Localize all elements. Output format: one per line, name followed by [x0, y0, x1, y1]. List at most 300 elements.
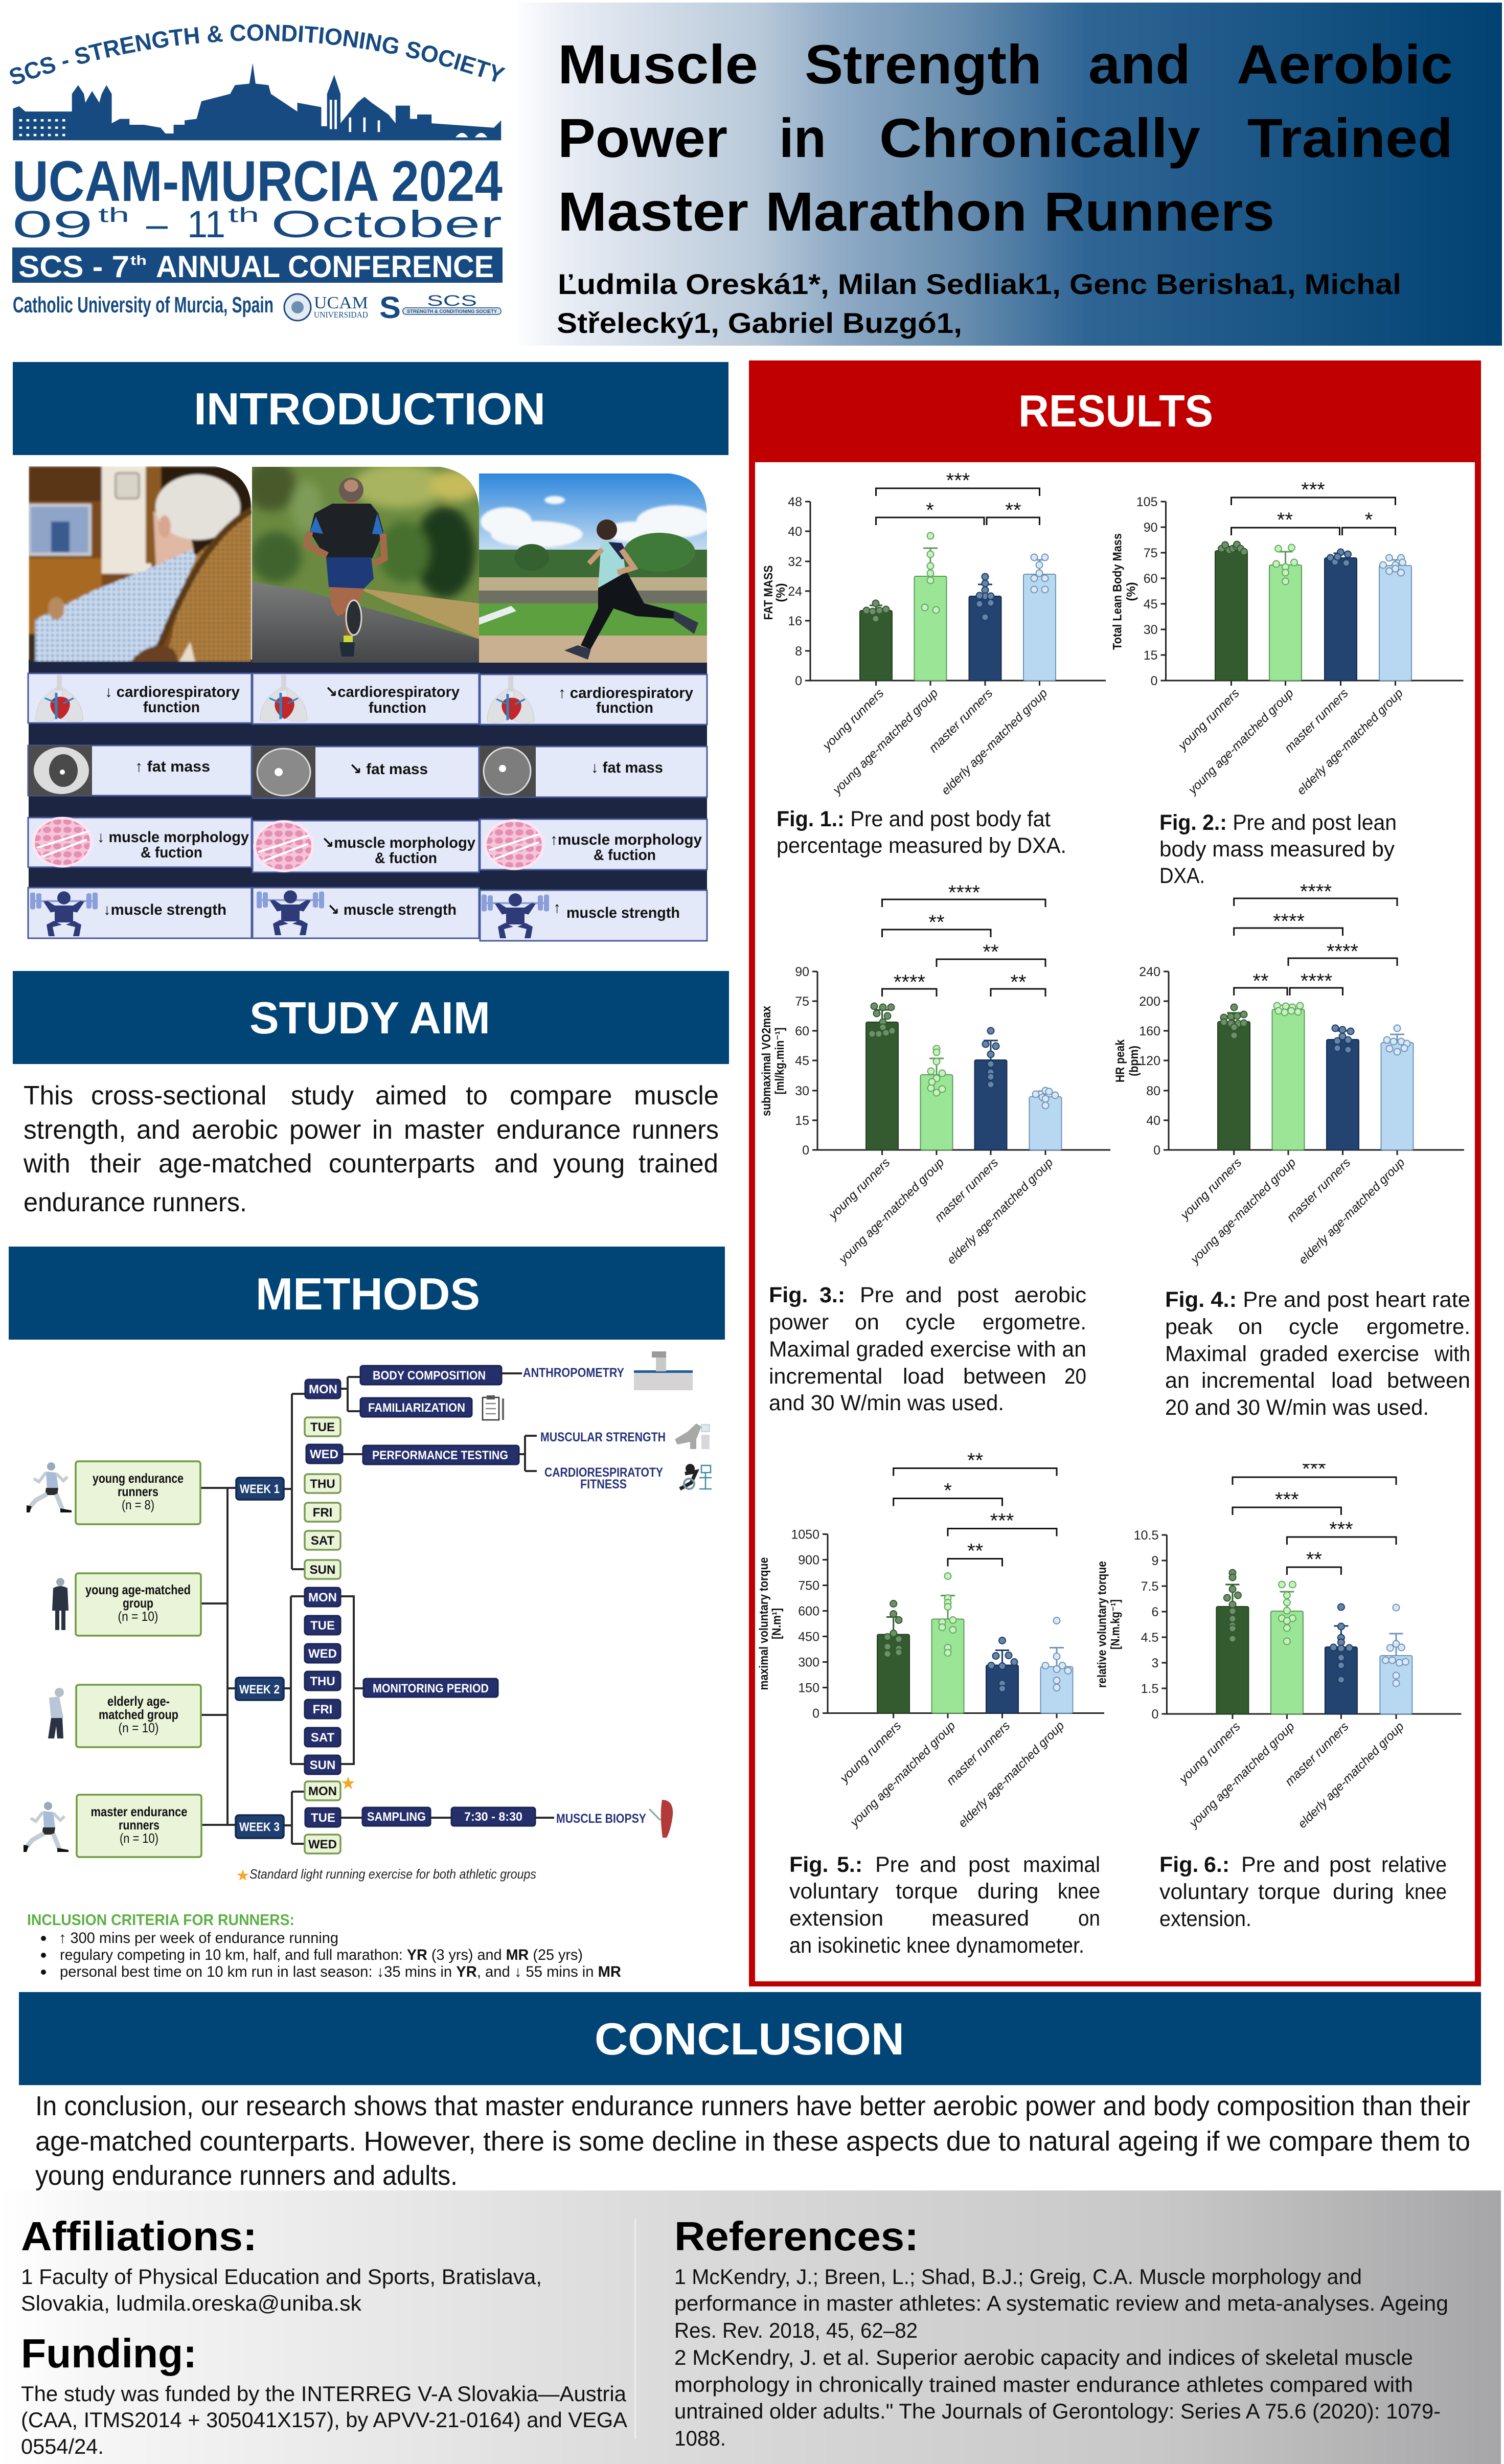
chart: fig 3 VO2max: **: [983, 941, 999, 963]
chart: fig 3 VO2max: master runners: [932, 1156, 1001, 1225]
heading: conclusion: CONCLUSION: [595, 2014, 904, 2064]
week 2 days: FRI: [313, 1703, 332, 1716]
chart: fig 3 VO2max: **: [928, 911, 945, 934]
references: morphology in chronically trained master endurance athletes compared with: [674, 2372, 1413, 2397]
chart: fig 1 fat mass: (%): [774, 583, 788, 602]
chart: fig 1 fat mass: 0: [795, 674, 802, 688]
chart: fig 6 relative voluntary torque: 3: [1151, 1656, 1158, 1670]
week 1 days: SUN: [310, 1563, 335, 1577]
measure labels: MUSCLE BIOPSY: [556, 1812, 646, 1826]
caption: fig 4: cycle: [1289, 1315, 1339, 1339]
process boxes: PERFORMANCE TESTING: [372, 1449, 508, 1462]
chart: fig 5 maximal voluntary torque: 0: [812, 1707, 819, 1721]
chart: fig 1 fat mass: 48: [788, 495, 802, 509]
study aim text: their: [90, 1148, 141, 1178]
flowchart: study design: [24, 1351, 712, 1884]
caption: fig 3: Maximal graded exercise with an: [769, 1337, 1086, 1362]
heading: introduction: [13, 362, 728, 455]
caption: fig 4: 20 and 30 W/min was used.: [1165, 1395, 1429, 1420]
chart: fig 2 lean body mass: 105: [1136, 495, 1157, 509]
week 3 days: MON: [308, 1784, 337, 1798]
study aim text: aerobic: [192, 1115, 278, 1144]
chart: fig 5 maximal voluntary torque: 750: [798, 1579, 819, 1593]
results heading: RESULTS: [1018, 386, 1213, 436]
study aim text: aimed: [375, 1080, 447, 1110]
references: untrained older adults." The Journals of Gerontology: Series A 75.6 (2020): 1079-: [674, 2399, 1441, 2423]
caption: fig 4: Maximal: [1165, 1342, 1247, 1366]
group: elderly age-matched: (n = 10): [119, 1720, 158, 1735]
study aim text: counterparts: [329, 1148, 475, 1178]
title: Aerobic: [1237, 33, 1453, 95]
week 1 days: SAT: [311, 1534, 334, 1548]
logo dates: 11: [187, 203, 225, 245]
conclusion text: age-matched counterparts. However, there is some decline in these aspects due to natural ageing if we compare them to: [35, 2126, 1470, 2157]
chart: fig 6 relative voluntary torque: 1.5: [1141, 1682, 1158, 1696]
chart: fig 5 maximal voluntary torque: **: [967, 1449, 983, 1472]
chart: fig 3 VO2max: [ml/kg.min⁻¹]: [773, 1028, 787, 1094]
SCS mini logo: STRENGTH & CONDITIONING SOCIETY: [407, 309, 497, 314]
row: muscle morphology: ↑muscle morphology: [550, 831, 702, 848]
flowchart connector lines: [200, 1373, 554, 1844]
chart: fig 3 VO2max: ****: [894, 971, 925, 993]
caption: fig 5: knee: [1058, 1879, 1100, 1904]
row: cardiorespiratory: function: [596, 699, 653, 716]
chart: fig 3 VO2max: 75: [795, 994, 809, 1009]
week 3 days: TUE: [311, 1811, 335, 1825]
chart: fig 4 HR peak: 240: [1139, 965, 1160, 979]
caption: fig 2: Fig. 2.: Pre and post lean: [1159, 810, 1397, 835]
chart: fig 2 lean body mass: 60: [1144, 572, 1157, 586]
references: 1088.: [674, 2426, 726, 2450]
week labels: WEEK 2: [239, 1683, 280, 1697]
chart: fig 5 maximal voluntary torque: elderly age-matched group: [955, 1719, 1067, 1830]
row: fat mass: [28, 745, 707, 798]
measure labels: ANTHROPOMETRY: [523, 1366, 624, 1380]
week labels: WEEK 1: [240, 1482, 280, 1496]
caption: fig 2: body mass measured by: [1159, 837, 1395, 862]
inclusion bullets: regulary competing in 10 km, half, and full marathon: YR (3 yrs) and MR (25 yrs): [60, 1947, 583, 1963]
chart: fig 4 HR peak: ****: [1327, 940, 1358, 963]
caption: fig 3: on: [855, 1310, 879, 1335]
chart: fig 3 VO2max: [760, 881, 1110, 1267]
group: elderly age-matched: matched group: [99, 1707, 178, 1722]
affiliations: Slovakia, ludmila.oreska@uniba.sk: [21, 2291, 362, 2315]
references: Res. Rev. 2018, 45, 62–82: [674, 2318, 918, 2342]
chart: fig 3 VO2max: ****: [948, 881, 980, 904]
conference logo: [10, 24, 506, 325]
chart: fig 1 fat mass: *: [926, 499, 934, 522]
logo dates: th: [228, 204, 259, 227]
funding: 0554/24.: [21, 2434, 104, 2458]
caption: fig 5: maximal: [1023, 1852, 1100, 1877]
week 2 days: WED: [308, 1647, 337, 1661]
caption: fig 4: graded: [1260, 1342, 1328, 1366]
caption: fig 6: and: [1283, 1852, 1320, 1877]
chart: fig 3 VO2max: 90: [795, 965, 809, 979]
caption: fig 4: an: [1165, 1368, 1190, 1393]
title: Strength: [805, 33, 1042, 95]
panel: introduction comparison table: [28, 460, 713, 941]
group: master endurance runners: master endurance: [91, 1804, 187, 1819]
chart: fig 5 maximal voluntary torque: maximal voluntary torque: [757, 1557, 771, 1690]
chart: fig 5 maximal voluntary torque: *: [944, 1480, 952, 1502]
chart: fig 1 fat mass: 8: [795, 644, 802, 659]
logo dates: –: [146, 203, 168, 245]
title: Marathon: [765, 180, 1027, 242]
title: Power: [558, 107, 727, 169]
chart: fig 1 fat mass: FAT MASS: [762, 566, 776, 620]
measure labels: CARDIORESPIRATOTY: [544, 1465, 663, 1480]
study aim text: endurance: [496, 1115, 621, 1144]
chart: fig 6 relative voluntary torque: ***: [1329, 1518, 1353, 1541]
caption: fig 3: ergometre.: [983, 1310, 1086, 1335]
chart: fig 6 relative voluntary torque: 9: [1151, 1554, 1158, 1568]
caption: fig 3: between: [963, 1364, 1046, 1389]
footer gradient: [0, 2190, 1501, 2464]
inclusion criteria: [27, 1911, 621, 1980]
caption: fig 5: voluntary: [789, 1879, 879, 1904]
chart: fig 5 maximal voluntary torque: 900: [798, 1553, 819, 1568]
logo main title: UCAM-MURCIA 2024: [12, 149, 503, 213]
chart: fig 2 lean body mass: elderly age-matched group: [1294, 686, 1406, 798]
caption: fig 3: and: [905, 1283, 942, 1307]
chart: fig 4 HR peak: ****: [1301, 970, 1332, 992]
authors: Ľudmila Oreská1*, Milan Sedliak1, Genc Berisha1, Michal: [558, 268, 1401, 300]
chart: fig 2 lean body mass: 45: [1144, 597, 1157, 612]
chart: fig 6 relative voluntary torque: master runners: [1283, 1720, 1352, 1789]
chart: fig 4 HR peak: young age-matched group: [1187, 1156, 1298, 1267]
chart: fig 6 relative voluntary torque: young age-matched group: [1186, 1720, 1297, 1831]
caption: fig 5: Pre: [875, 1852, 909, 1877]
chart: fig 2 lean body mass: **: [1277, 509, 1293, 531]
week 3 days: WED: [308, 1838, 337, 1851]
UCAM seal: UNIVERSIDAD: [314, 310, 368, 320]
group: young age-matched: [52, 1573, 201, 1636]
photo: young runner: [479, 473, 713, 663]
chart: fig 3 VO2max: elderly age-matched group: [944, 1156, 1056, 1267]
caption: fig 5: and: [920, 1852, 956, 1877]
measure labels: MUSCULAR STRENGTH: [540, 1430, 666, 1444]
row: cardiorespiratory: ↘cardiorespiratory: [325, 684, 460, 700]
title: [558, 33, 1453, 242]
row: muscle morphology: ↓ muscle morphology: [97, 829, 249, 846]
chart: fig 4 HR peak: 200: [1139, 994, 1160, 1009]
chart: fig 4 HR peak: [1113, 880, 1464, 1267]
chart: fig 5 maximal voluntary torque: young age-matched group: [847, 1719, 958, 1830]
title: in: [779, 107, 826, 169]
group: master endurance runners: (n = 10): [120, 1830, 158, 1846]
logo city skyline: [13, 63, 501, 140]
references: 2 McKendry, J. et al. Superior aerobic capacity and indices of skeletal muscle: [674, 2345, 1413, 2369]
caption: fig 3: load: [903, 1364, 944, 1389]
heading: introduction: INTRODUCTION: [194, 383, 545, 434]
chart: fig 2 lean body mass: [1110, 479, 1463, 798]
chart: fig 5 maximal voluntary torque: 150: [798, 1681, 819, 1696]
caption: fig 6: relative: [1381, 1852, 1447, 1877]
row: fat mass: ↑ fat mass: [135, 758, 210, 775]
week 2 days: THU: [310, 1675, 335, 1688]
row: cardiorespiratory: function: [143, 699, 200, 716]
caption: fig 6: Fig.: [1159, 1852, 1198, 1877]
chart: fig 6 relative voluntary torque: 10.5: [1134, 1528, 1158, 1543]
chart: fig 2 lean body mass: (%): [1125, 582, 1138, 601]
funding: (CAA, ITMS2014 + 305041X157), by APVV-21-0164) and VEGA: [21, 2408, 627, 2432]
chart: fig 5 maximal voluntary torque: master runners: [944, 1719, 1013, 1788]
process boxes: BODY COMPOSITION: [373, 1369, 486, 1383]
photo: seated elderly man: [29, 466, 252, 662]
footer panel: [0, 2190, 1501, 2464]
caption: fig 6: post: [1329, 1852, 1371, 1877]
chart: fig 1 fat mass: 16: [788, 614, 802, 628]
footnote: Standard light running exercise for both athletic groups: [249, 1866, 536, 1882]
chart: fig 6 relative voluntary torque: 6: [1151, 1605, 1158, 1619]
week 2 days: SUN: [310, 1758, 335, 1772]
chart: fig 4 HR peak: HR peak: [1113, 1039, 1127, 1082]
chart: fig 4 HR peak: ****: [1273, 910, 1305, 933]
caption: fig 6: torque: [1258, 1880, 1320, 1904]
caption: fig 5: torque: [896, 1879, 958, 1904]
caption: fig 3: power: [769, 1310, 829, 1335]
logo dates: [12, 203, 502, 245]
row: fat mass: ↓ fat mass: [591, 759, 663, 776]
title: and: [1088, 33, 1191, 95]
group: elderly age-matched: [48, 1685, 201, 1747]
chart: fig 5 maximal voluntary torque: 1050: [791, 1528, 819, 1542]
measure labels: [523, 1366, 666, 1826]
logo venue line: Catholic University of Murcia, Spain: [13, 292, 274, 318]
chart: fig 4 HR peak: elderly age-matched group: [1296, 1156, 1407, 1267]
week 1 days: [305, 1380, 343, 1579]
chart: fig 1 fat mass: ***: [946, 469, 970, 492]
caption: fig 4: with: [1434, 1342, 1470, 1366]
chart: fig 2 lean body mass: 15: [1144, 648, 1157, 663]
chart: fig 6 relative voluntary torque: [1095, 1457, 1461, 1831]
caption: fig 4: peak: [1165, 1315, 1213, 1339]
row: muscle strength: ↓muscle strength: [103, 901, 226, 918]
row: muscle strength: ↑: [553, 899, 561, 916]
title: Master: [558, 180, 748, 242]
group: young endurance runners: runners: [118, 1484, 158, 1499]
caption: fig 3: post: [957, 1283, 998, 1307]
icon: muscle leg: [649, 1800, 673, 1838]
caption: fig 2: DXA.: [1159, 864, 1205, 888]
chart: fig 4 HR peak: master runners: [1284, 1156, 1353, 1225]
row: muscle morphology: & fuction: [141, 844, 202, 861]
chart: fig 4 HR peak: 80: [1146, 1084, 1160, 1098]
logo dates: October: [271, 203, 502, 245]
logo conference bar: SCS - 7: [18, 250, 129, 284]
title: Muscle: [558, 33, 758, 95]
caption: fig 5: an isokinetic knee dynamometer.: [789, 1933, 1084, 1958]
row: muscle strength: [28, 888, 707, 941]
affiliations: Affiliations:: [21, 2213, 257, 2259]
references: References:: [674, 2213, 919, 2259]
caption: fig 6: extension.: [1159, 1907, 1251, 1931]
logo conference bar: [12, 247, 503, 284]
chart: fig 6 relative voluntary torque: 7.5: [1141, 1579, 1158, 1594]
caption: fig 1: [777, 807, 1066, 858]
measure labels: FITNESS: [580, 1477, 627, 1491]
chart: fig 2 lean body mass: young runners: [1175, 686, 1242, 754]
chart: fig 6 relative voluntary torque: **: [1306, 1548, 1322, 1571]
conclusion text: [35, 2091, 1470, 2191]
caption: fig 4: between: [1387, 1368, 1470, 1393]
UCAM seal: [284, 293, 368, 321]
caption: fig 4: ergometre.: [1366, 1315, 1470, 1339]
chart: fig 6 relative voluntary torque: elderly age-matched group: [1295, 1720, 1407, 1831]
inclusion bullets: personal best time on 10 km run in last season: ↓35 mins in YR, and ↓ 55 mins in MR: [60, 1963, 621, 1980]
chart: fig 2 lean body mass: *: [1365, 509, 1373, 531]
chart: fig 5 maximal voluntary torque: [757, 1449, 1104, 1830]
UCAM seal: UCAM: [314, 293, 368, 312]
week 1 days: WED: [310, 1448, 338, 1461]
SCS mini logo: [379, 290, 501, 325]
group: young endurance runners: (n = 8): [122, 1497, 154, 1512]
chart: fig 3 VO2max: 15: [795, 1114, 809, 1128]
week 3 days: [305, 1781, 340, 1853]
authors: [557, 268, 1401, 339]
chart: fig 1 fat mass: elderly age-matched group: [939, 686, 1050, 798]
caption: fig 6: knee: [1405, 1880, 1447, 1904]
week 2 days: MON: [308, 1591, 337, 1604]
chart: fig 4 HR peak: 120: [1139, 1054, 1160, 1068]
chart: fig 4 HR peak: young runners: [1177, 1156, 1244, 1223]
caption: fig 4: [1165, 1287, 1470, 1420]
chart: fig 6 relative voluntary torque: 0: [1151, 1707, 1158, 1722]
title: Chronically: [879, 107, 1200, 169]
study aim text: power: [289, 1115, 361, 1144]
chart: fig 1 fat mass: 40: [788, 525, 802, 539]
references: performance in master athletes: A systematic review and meta-analyses. Ageing: [674, 2291, 1448, 2315]
chart: fig 5 maximal voluntary torque: 450: [798, 1630, 819, 1644]
row: cardiorespiratory: [28, 673, 707, 725]
icon: isokinetic chair: [675, 1423, 710, 1449]
process boxes: FAMILIARIZATION: [368, 1401, 465, 1415]
table dark backdrop: [29, 660, 707, 938]
chart: fig 5 maximal voluntary torque: 600: [798, 1604, 819, 1619]
week 1 days: THU: [310, 1477, 335, 1491]
process boxes: SAMPLING: [367, 1810, 426, 1824]
chart: fig 4 HR peak: ****: [1300, 880, 1332, 903]
heading: study aim: [13, 971, 729, 1064]
chart: fig 4 HR peak: 40: [1146, 1114, 1160, 1128]
week 2 days: SAT: [311, 1731, 334, 1745]
group: young age-matched: group: [123, 1595, 153, 1611]
row: cardiorespiratory: function: [369, 699, 426, 716]
logo dates: 09: [12, 203, 93, 245]
study aim text: with: [23, 1148, 71, 1178]
chart: fig 2 lean body mass: 30: [1144, 623, 1157, 637]
caption: fig 5: [789, 1852, 1100, 1958]
study aim text: master: [404, 1115, 484, 1144]
chart: fig 2 lean body mass: 90: [1144, 521, 1157, 535]
caption: fig 5: measured: [931, 1906, 1029, 1931]
chart: fig 3 VO2max: **: [1010, 971, 1027, 993]
caption: fig 6: Pre: [1241, 1852, 1275, 1877]
row: muscle morphology: & fuction: [375, 850, 437, 867]
heading: study aim: STUDY AIM: [249, 992, 490, 1043]
funding: The study was funded by the INTERREG V-A Slovakia—Austria: [21, 2382, 627, 2406]
week 1 days: TUE: [310, 1420, 335, 1434]
results frame: [749, 360, 1481, 1986]
chart: fig 2 lean body mass: master runners: [1282, 686, 1351, 755]
caption: fig 5: on: [1078, 1906, 1100, 1931]
icon: clipboard: [483, 1395, 504, 1420]
chart: fig 5 maximal voluntary torque: **: [967, 1540, 983, 1563]
study aim text: study: [291, 1080, 354, 1110]
row: muscle morphology: ↘muscle morphology: [322, 834, 475, 851]
chart: fig 1 fat mass: young age-matched group: [829, 686, 941, 798]
inclusion bullets: ↑ 300 mins per week of endurance running: [59, 1930, 338, 1947]
icon: star: ★: [340, 1774, 356, 1793]
row: muscle morphology: & fuction: [594, 847, 656, 864]
inclusion bullets: [41, 1930, 621, 1980]
inclusion heading: INCLUSION CRITERIA FOR RUNNERS:: [27, 1911, 294, 1929]
row: cardiorespiratory: ↓ cardiorespiratory: [105, 684, 240, 700]
chart: fig 2 lean body mass: young age-matched group: [1185, 686, 1296, 798]
process boxes: MONITORING PERIOD: [373, 1682, 489, 1696]
conclusion text: young endurance runners and adults.: [35, 2160, 458, 2191]
chart: fig 3 VO2max: young runners: [826, 1156, 893, 1223]
week labels: WEEK 3: [239, 1820, 280, 1834]
chart: fig 1 fat mass: **: [1005, 499, 1021, 522]
caption: fig 6: during: [1333, 1880, 1394, 1904]
icon: DXA machine: [634, 1351, 693, 1390]
group: master endurance runners: runners: [119, 1817, 159, 1833]
heading: conclusion: [19, 1992, 1481, 2085]
study aim text: endurance runners.: [24, 1187, 247, 1217]
caption: fig 4: on: [1238, 1315, 1263, 1339]
group: master endurance runners: [24, 1795, 201, 1857]
study aim text: and: [494, 1148, 538, 1178]
study aim text: to: [466, 1080, 488, 1110]
caption: fig 3: aerobic: [1014, 1283, 1086, 1307]
group: elderly age-matched: elderly age-: [107, 1693, 170, 1709]
title: Trained: [1247, 107, 1453, 169]
logo dates: th: [98, 204, 129, 227]
chart: fig 4 HR peak: (bpm): [1127, 1046, 1141, 1076]
panel: results: [749, 360, 1481, 1986]
caption: fig 3: [769, 1283, 1086, 1415]
chart: fig 3 VO2max: 45: [795, 1054, 809, 1068]
caption: fig 4: Fig. 4.: Pre and post heart rate: [1165, 1287, 1470, 1312]
icon: cycle ergometer: [680, 1464, 712, 1489]
caption: fig 2: [1159, 810, 1397, 888]
chart: fig 1 fat mass: 32: [788, 555, 802, 569]
row: muscle strength: muscle strength: [566, 905, 680, 921]
study aim text: compare: [510, 1080, 612, 1110]
photo: older runner: [245, 460, 481, 663]
caption: fig 3: 3.:: [819, 1283, 845, 1307]
caption: fig 4: load: [1331, 1368, 1373, 1393]
SCS mini logo: S: [379, 290, 401, 325]
logo conference bar: ANNUAL CONFERENCE: [156, 250, 494, 284]
chart: fig 3 VO2max: submaximal VO2max: [760, 1005, 773, 1116]
chart: fig 6 relative voluntary torque: young runners: [1176, 1720, 1243, 1787]
group: young age-matched: (n = 10): [118, 1609, 158, 1624]
row: muscle morphology: [28, 817, 707, 872]
caption: fig 5: post: [968, 1852, 1010, 1877]
study aim text: strength,: [24, 1115, 126, 1144]
footnote: ★: [236, 1867, 249, 1884]
authors: Střelecký1, Gabriel Buzgó1,: [557, 307, 962, 339]
chart: fig 6 relative voluntary torque: [N.m.kg⁻¹]: [1108, 1599, 1122, 1649]
chart: fig 1 fat mass: 24: [788, 584, 802, 599]
week 1 days: MON: [309, 1383, 337, 1396]
title: Runners: [1044, 180, 1274, 242]
study aim text: young: [553, 1148, 625, 1178]
chart: fig 4 HR peak: 160: [1139, 1024, 1160, 1038]
